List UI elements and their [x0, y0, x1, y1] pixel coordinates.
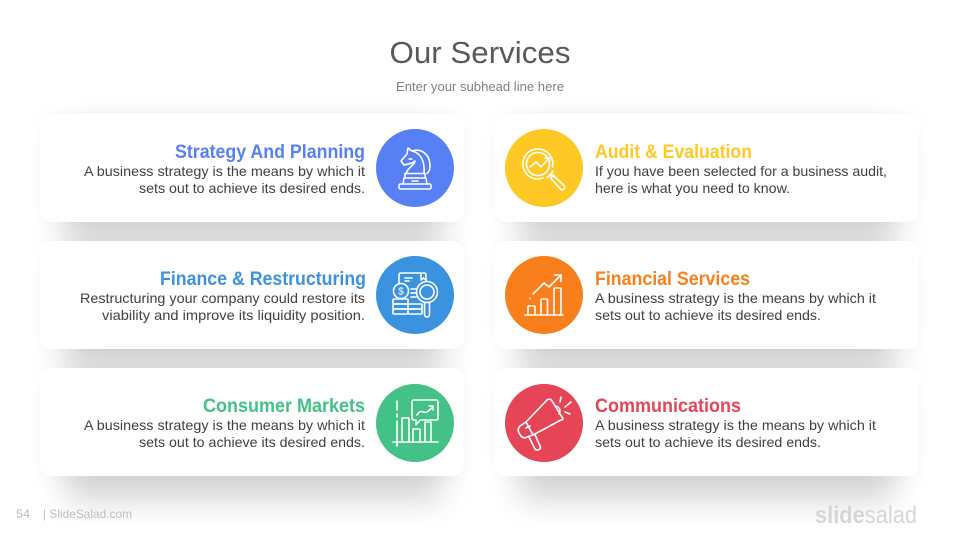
text: financial services description: sets out to achieve its desired ends. [595, 307, 821, 323]
heading: audit and evaluation: Audit & Evaluation [595, 142, 752, 163]
panel: communications [495, 368, 919, 500]
heading: financial services: Financial Services [595, 269, 750, 290]
footer: page number: 54 [16, 507, 30, 521]
text: consumer markets description: A business strategy is the means by which it [84, 417, 365, 433]
text: finance description: viability and improve its liquidity position. [102, 307, 365, 323]
text: finance description: Restructuring your company could restore its [80, 290, 365, 306]
subhead: Enter your subhead line here [396, 79, 564, 94]
logo: slidesalad: slidesalad [815, 502, 917, 529]
text: communications description: sets out to achieve its desired ends. [595, 434, 821, 450]
text: audit description [595, 163, 887, 196]
heading: strategy and planning: Strategy And Planning [175, 142, 365, 163]
text: communications description: A business strategy is the means by which it [595, 417, 876, 433]
text: audit description: If you have been selected for a business audit, [595, 163, 887, 179]
icon: financial document and magnifier: $ [398, 286, 404, 298]
text: strategy description: A business strategy is the means by which it [84, 163, 365, 179]
icon: chart with speech bubble [376, 384, 454, 462]
icon: chess knight [376, 129, 454, 207]
footer: site name: | SlideSalad.com [43, 507, 132, 521]
icon: financial document and magnifier [376, 256, 454, 334]
text: communications description [595, 417, 876, 450]
panel: financial services [495, 241, 919, 373]
panel: strategy and planning [40, 114, 464, 246]
text: strategy description: sets out to achieve its desired ends. [139, 180, 365, 196]
text: consumer markets description: sets out to achieve its desired ends. [139, 434, 365, 450]
icon: rising bar chart [505, 256, 583, 334]
text: finance description [80, 290, 365, 323]
heading: consumer markets: Consumer Markets [203, 396, 365, 417]
heading: communications: Communications [595, 396, 741, 417]
icon: megaphone [505, 384, 583, 462]
panel: consumer markets [40, 368, 464, 500]
title: Our Services [390, 35, 570, 70]
text: financial services description: A business strategy is the means by which it [595, 290, 876, 306]
text: strategy description [84, 163, 365, 196]
panel: finance and restructuring [40, 241, 464, 373]
heading: finance and restructuring: Finance & Restructuring [160, 269, 366, 290]
text: financial services description [595, 290, 876, 323]
icon: magnifier with trend line [505, 129, 583, 207]
text: audit description: here is what you need to know. [595, 180, 790, 196]
panel: audit and evaluation [495, 114, 919, 246]
text: consumer markets description [84, 417, 365, 450]
